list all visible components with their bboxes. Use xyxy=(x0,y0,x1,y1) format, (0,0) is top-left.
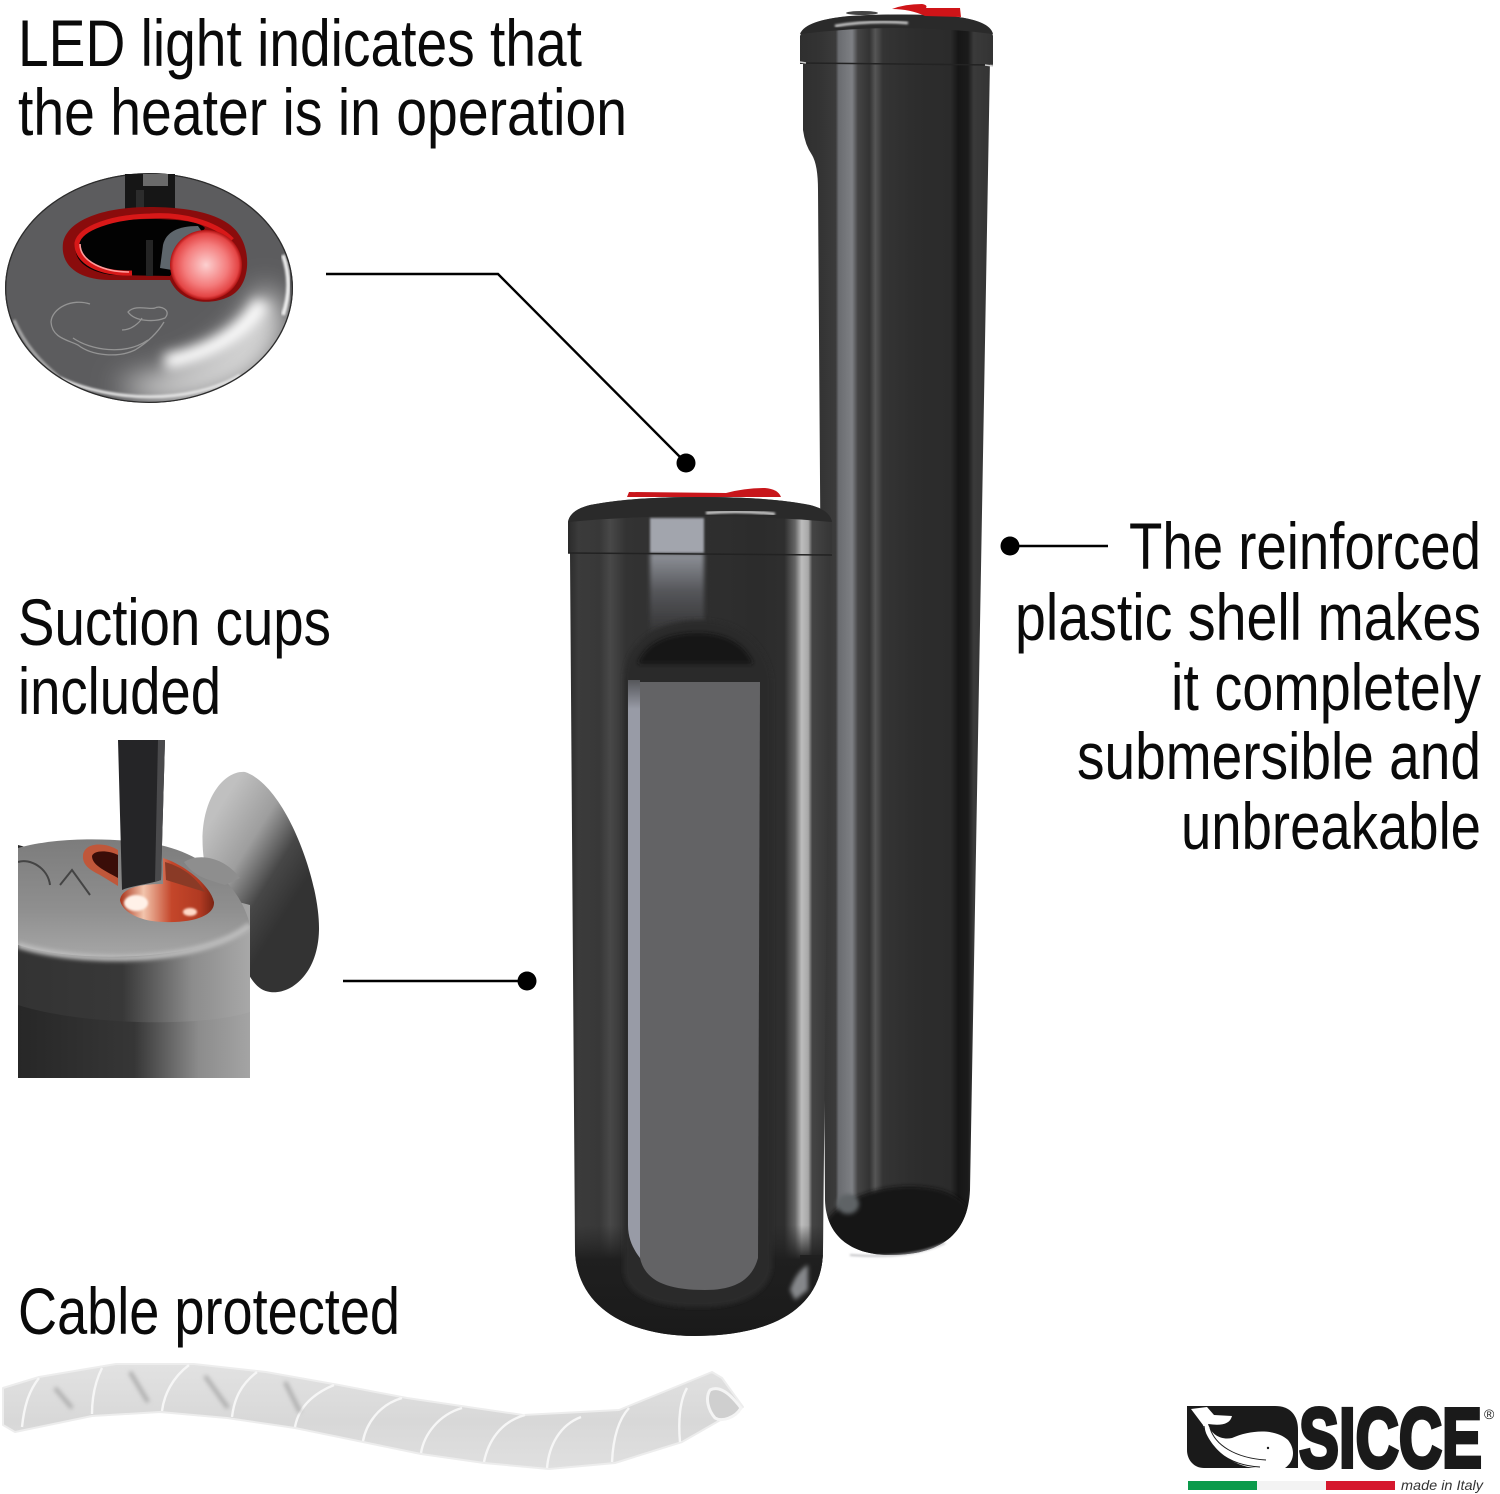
short heater body xyxy=(570,553,830,1336)
heater cap side xyxy=(18,845,250,1078)
red LED ring xyxy=(63,207,247,302)
leader line: suction cups xyxy=(343,972,536,990)
short heater cap xyxy=(568,497,832,553)
heater cap top xyxy=(18,839,250,957)
icon: spiral cable protector xyxy=(3,1364,743,1469)
heading: suction cups: included xyxy=(18,654,221,728)
heading: LED light xyxy=(18,6,627,149)
heading: suction cups: Suction cups xyxy=(18,585,331,659)
recessed panel xyxy=(624,620,772,1307)
heading: LED light: the heater is in operation xyxy=(18,75,627,149)
whale badge xyxy=(1187,1406,1298,1468)
top vents xyxy=(846,11,878,15)
tall heater body xyxy=(803,60,990,1255)
flag stripes xyxy=(1188,1481,1395,1490)
power cable xyxy=(118,740,165,890)
leader line: shell xyxy=(1000,536,1108,556)
glowing LED xyxy=(170,230,242,300)
tall heater xyxy=(800,4,993,1260)
whale emboss xyxy=(51,302,167,355)
registered mark: ® xyxy=(1484,1406,1495,1422)
short heater xyxy=(560,488,840,1340)
tall heater cap xyxy=(800,14,993,64)
tagline: made in Italy xyxy=(1401,1477,1484,1493)
tall heater red button xyxy=(892,4,961,17)
open end xyxy=(708,1389,741,1420)
heading: LED light: LED light indicates that xyxy=(18,6,582,80)
text block: reinforced plastic shell xyxy=(1015,509,1481,863)
cup neck xyxy=(184,857,240,885)
spiral shading xyxy=(55,1372,300,1412)
icon: LED disc close-up xyxy=(5,173,293,403)
heading: suction cups xyxy=(18,585,331,728)
icon: suction cup close-up xyxy=(18,740,319,1078)
whale relief xyxy=(18,861,90,895)
leader line: LED xyxy=(326,274,696,472)
spiral seams xyxy=(22,1365,687,1468)
copper cable gland xyxy=(83,845,214,922)
notch at top of disc xyxy=(125,174,175,235)
logo: SICCE made in Italy xyxy=(1187,1391,1495,1493)
heading: cable protected: Cable protected xyxy=(18,1274,400,1348)
suction cup xyxy=(203,772,319,992)
short heater red button xyxy=(627,488,781,497)
